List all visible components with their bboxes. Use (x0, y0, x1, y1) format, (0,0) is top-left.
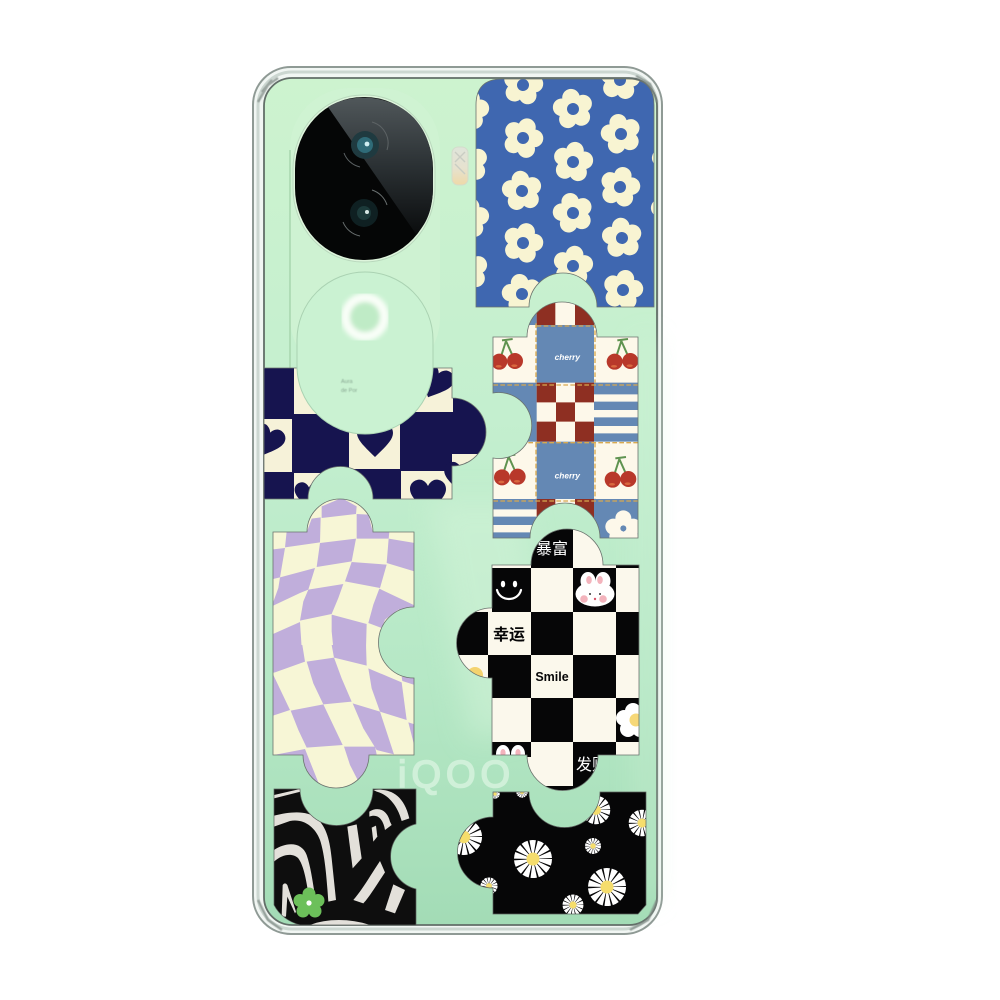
cream squares (262, 366, 484, 501)
corner bumpers (258, 76, 657, 930)
back sheen (430, 340, 654, 900)
daisy icon (616, 703, 639, 737)
small cream flower (605, 510, 638, 538)
zebra stripes (274, 789, 409, 925)
stitching (493, 323, 640, 501)
heart piece outline (264, 368, 486, 499)
phone case (253, 67, 662, 934)
cherry panel pattern (490, 300, 643, 545)
puzzle piece: black and cream checkerboard (456, 529, 639, 790)
checker labels: 发财 (576, 756, 608, 774)
phone back (264, 78, 657, 925)
green flower (294, 888, 324, 918)
upper lilac cells (270, 498, 417, 648)
small print (341, 379, 357, 394)
daisy flowers (452, 788, 651, 912)
clear case outer shell (253, 67, 662, 934)
iQOO logo: iQOO (398, 754, 515, 796)
camera diagonal reflection (328, 98, 433, 234)
puzzle piece: cherry gingham (490, 300, 643, 545)
black field (458, 792, 646, 914)
flash (452, 147, 468, 185)
checker piece outline (457, 529, 639, 790)
flower pattern (476, 79, 654, 307)
smile icon (497, 581, 521, 599)
puzzle piece: navy hearts (264, 368, 486, 499)
cherry piece outline (493, 302, 638, 538)
cherry panel pattern: cherry (555, 470, 580, 480)
small print: de Por (341, 388, 357, 394)
cream field (270, 498, 420, 793)
column panel (290, 88, 440, 378)
checker labels: Smile (535, 670, 569, 684)
zebra piece outline (274, 789, 416, 925)
black squares (452, 528, 641, 792)
daisy piece outline (457, 792, 646, 914)
camera black glass (295, 97, 433, 260)
column edge (289, 150, 291, 368)
glowing ring (346, 298, 384, 336)
camera column (290, 88, 440, 378)
camera ring (293, 95, 435, 262)
puzzle piece: black and white zebra (274, 789, 416, 925)
navy field (260, 365, 490, 505)
puzzle piece: black daisies (458, 792, 646, 914)
upper lens (344, 122, 388, 167)
case inner highlight (258, 72, 657, 929)
blue field (470, 75, 660, 310)
blue piece outline (476, 79, 654, 307)
camera module (293, 95, 435, 262)
cherries (491, 339, 523, 370)
checker labels: 幸运 (493, 626, 525, 644)
oval body (297, 272, 433, 434)
lower lens (343, 190, 387, 236)
black field (274, 789, 416, 925)
puzzle piece: blue flowers (476, 79, 654, 307)
lilac piece outline (273, 499, 414, 788)
puzzle piece: wavy lilac check (270, 498, 420, 793)
small print: Aura (341, 379, 354, 385)
bunny icon (576, 572, 614, 606)
hearts (264, 368, 467, 499)
sun icon (469, 667, 483, 676)
checker labels (494, 540, 598, 772)
cherry labels: cherry (555, 352, 580, 362)
checker labels: 暴富 (536, 540, 568, 558)
cream field (459, 530, 639, 786)
oval light module (297, 272, 433, 434)
lower lilac cells (270, 645, 417, 787)
peeking bunny (496, 745, 525, 755)
